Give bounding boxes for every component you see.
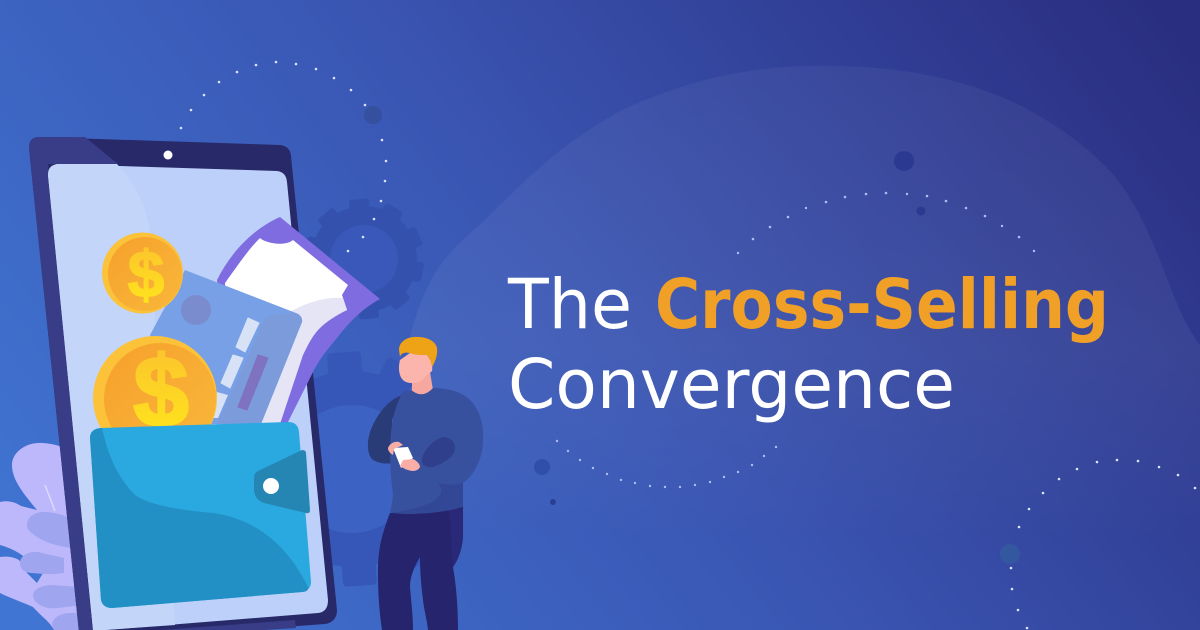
banknote [217,217,380,424]
decorative circles [364,106,1020,564]
leg highlights [448,509,463,567]
torso [390,388,483,514]
lower sweater shade [390,483,463,514]
phone side highlight [29,137,296,630]
screen highlight [48,164,175,630]
hands [388,442,403,455]
plant leaves [0,443,90,630]
person [368,337,483,630]
legs [378,505,463,630]
wallet clasp [254,450,310,513]
coin: large: $ [133,336,189,448]
coin: small: $ [128,237,164,311]
wallet [90,422,311,608]
neck [412,372,433,395]
phone body [29,137,337,630]
mini phone [393,447,413,468]
phone camera [164,150,172,160]
title word: The: The [507,265,632,345]
dotted arcs [180,61,1196,629]
elbow shade [422,437,455,467]
back arm [368,395,402,464]
coin: large [93,336,217,428]
wallet button [263,478,279,494]
title [507,265,1109,425]
phone [29,137,337,630]
credit card [150,270,302,424]
background blob [406,66,1200,630]
phone screen [48,164,328,630]
card chip [181,295,211,325]
title word: Cross-Selling: Cross-Selling [655,265,1109,345]
title word: Convergence: Convergence [508,345,955,425]
card stripes [236,318,259,352]
gear: upper [299,194,429,324]
gear: lower [227,344,477,594]
hair [399,337,437,367]
coin: small [102,232,183,314]
face [399,353,432,383]
